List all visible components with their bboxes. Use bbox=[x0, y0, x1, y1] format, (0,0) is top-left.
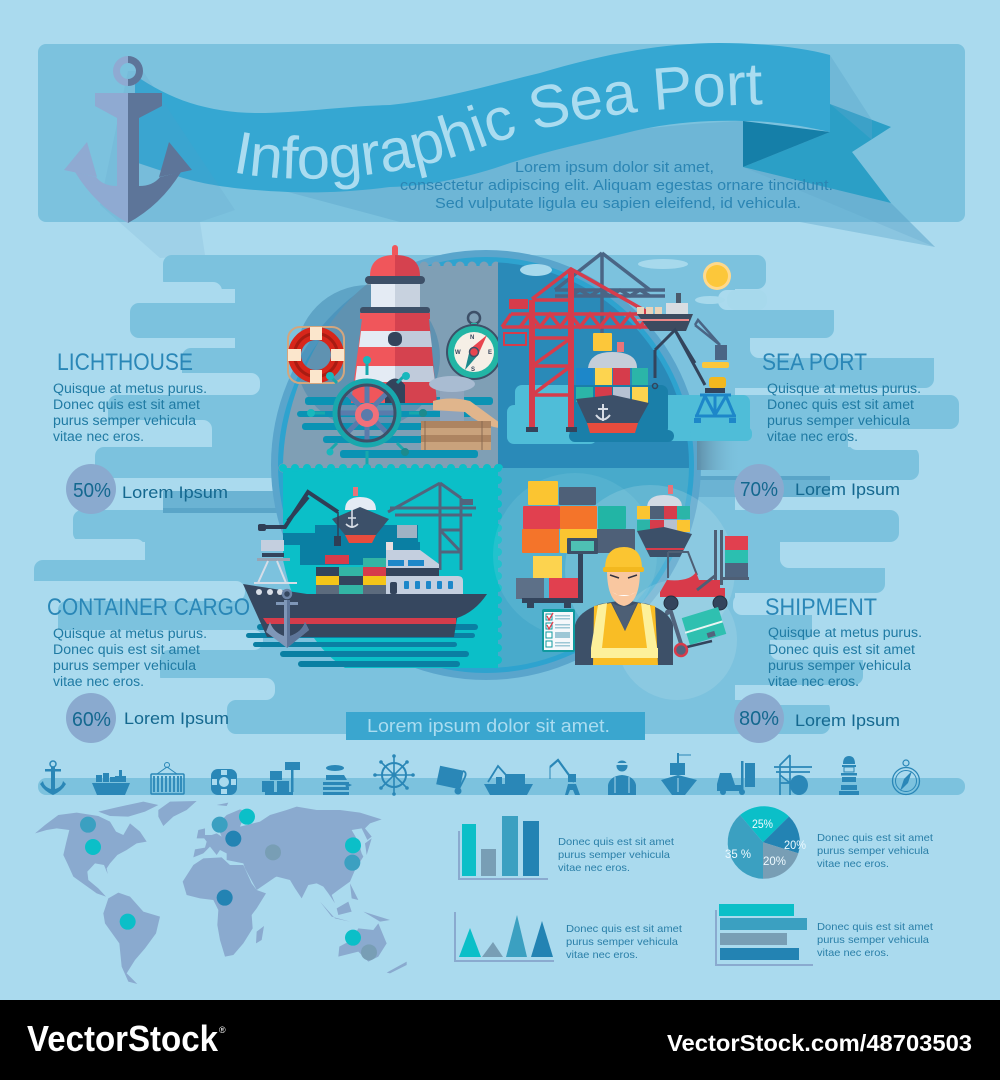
icon: port crane bbox=[774, 755, 812, 795]
text block bbox=[768, 625, 922, 689]
ribbon fold bbox=[743, 121, 830, 167]
icon: ship wheel bbox=[373, 754, 415, 796]
icon: worker bbox=[608, 760, 636, 795]
bar chart bbox=[459, 816, 674, 879]
panel: sea port text: SEA PORT bbox=[762, 349, 867, 376]
icon: container stack bbox=[522, 481, 635, 553]
icon: ferry bbox=[92, 770, 130, 795]
icon: compass bbox=[446, 312, 502, 380]
triangle chart: Donec quis est sit amet bbox=[566, 923, 682, 935]
icon: left deck crane bbox=[254, 492, 349, 583]
icon: compass: S bbox=[471, 367, 475, 373]
icon: small ship front bbox=[332, 487, 389, 543]
subtitle text: Lorem ipsum dolor sit amet, bbox=[515, 160, 714, 176]
callout bar: Lorem ipsum dolor sit amet. bbox=[367, 716, 610, 736]
text block: vitae nec eros. bbox=[53, 674, 144, 689]
icon: worker bbox=[575, 547, 673, 665]
icon: compass: W bbox=[455, 350, 461, 356]
icon: clipboard bbox=[542, 609, 575, 652]
icon: forklift bbox=[660, 530, 749, 610]
text block: purus semper vehicula bbox=[767, 413, 911, 428]
stat 60% bbox=[66, 693, 229, 743]
icon: forklift bbox=[717, 761, 755, 795]
background crane bbox=[555, 253, 665, 340]
text block: Donec quis est sit amet bbox=[768, 642, 915, 657]
footer bar bbox=[0, 1000, 1000, 1080]
text block: Donec quis est sit amet bbox=[53, 642, 200, 657]
icon: ship front bbox=[661, 753, 697, 795]
bar chart: vitae nec eros. bbox=[558, 862, 630, 874]
text block: Donec quis est sit amet bbox=[767, 397, 914, 412]
text block: Quisque at metus purus. bbox=[767, 381, 921, 396]
panel: shipment text bbox=[734, 594, 922, 743]
stat 60%: Lorem Ipsum bbox=[124, 709, 229, 728]
text block: purus semper vehicula bbox=[53, 658, 197, 673]
panel: lighthouse text: LICHTHOUSE bbox=[57, 349, 193, 376]
footer bar: VectorStock.com/48703503 bbox=[667, 1030, 972, 1056]
anchor shadow bbox=[100, 71, 235, 258]
stat 50%: Lorem Ipsum bbox=[122, 483, 228, 502]
icon: scale and boxes bbox=[262, 762, 300, 795]
icon: lighthouse bbox=[351, 245, 437, 403]
stat 80%: Lorem Ipsum bbox=[795, 711, 900, 730]
stat 50% bbox=[66, 464, 228, 514]
footer bar: VectorStock bbox=[27, 1018, 219, 1059]
icon: ship wheel bbox=[307, 356, 427, 472]
pie chart bbox=[725, 806, 933, 879]
text block: Quisque at metus purus. bbox=[53, 626, 207, 641]
stat 80%: 80% bbox=[739, 708, 779, 730]
panel: shipment text: SHIPMENT bbox=[765, 594, 877, 621]
triangle chart bbox=[455, 912, 682, 961]
pie chart: 20% bbox=[763, 854, 786, 868]
pie chart: vitae nec eros. bbox=[817, 858, 889, 870]
horizontal bar chart bbox=[716, 904, 933, 965]
Australia and islands bbox=[320, 838, 407, 973]
stat 80% bbox=[734, 693, 900, 743]
South America bbox=[103, 893, 160, 984]
icon: bollard bbox=[323, 765, 352, 795]
text block: purus semper vehicula bbox=[53, 413, 197, 428]
icon: clouds bbox=[520, 259, 767, 310]
panel: central circle bbox=[243, 245, 767, 700]
subtitle text bbox=[400, 160, 833, 212]
panel: header banner bbox=[38, 43, 965, 258]
panel: container cargo quadrant bbox=[243, 468, 500, 668]
ribbon tail bbox=[743, 104, 891, 203]
icon: cargo ship crane bbox=[484, 766, 533, 795]
icon: container bbox=[151, 762, 184, 794]
icon: cargo ship hull bbox=[243, 584, 487, 637]
icon: sun bbox=[703, 262, 731, 290]
ribbon lower shade bbox=[288, 121, 935, 247]
world map bbox=[35, 801, 407, 984]
water shapes bbox=[507, 385, 752, 444]
stat 70% bbox=[734, 464, 900, 514]
pie chart: purus semper vehicula bbox=[817, 845, 929, 857]
stat 60%: 60% bbox=[72, 709, 111, 731]
subtitle text: consectetur adipiscing elit. Aliquam egestas ornare tincidunt. bbox=[400, 178, 833, 194]
icon: bollard and rope bbox=[429, 376, 500, 428]
text block: vitae nec eros. bbox=[767, 429, 858, 444]
icon: wooden crate bbox=[421, 421, 491, 450]
icon: parcel truck bbox=[436, 766, 466, 794]
panel: sea port quadrant bbox=[498, 253, 767, 468]
panel: container cargo text bbox=[47, 594, 250, 743]
icon: cargo ship small bbox=[637, 485, 692, 557]
icon: red gantry crane bbox=[502, 269, 665, 432]
icon: life ring bbox=[288, 327, 344, 383]
pie chart: Donec quis est sit amet bbox=[817, 832, 933, 844]
wavy background bars bbox=[20, 255, 1000, 734]
water lines bbox=[297, 397, 493, 458]
text block bbox=[767, 381, 921, 444]
horizontal bar chart: vitae nec eros. bbox=[817, 947, 889, 959]
bar chart: purus semper vehicula bbox=[558, 849, 670, 861]
icon: distant ship bbox=[637, 293, 693, 331]
triangle chart: vitae nec eros. bbox=[566, 949, 638, 961]
icon: weighing scale bbox=[516, 538, 598, 608]
icon: dock crane bbox=[550, 760, 580, 795]
ribbon side shadow bbox=[830, 55, 872, 140]
icon: anchor bbox=[40, 761, 66, 795]
horizontal bar chart: Donec quis est sit amet bbox=[817, 921, 933, 933]
text block bbox=[53, 381, 207, 444]
icon: container ship bbox=[576, 333, 649, 433]
triangle chart: purus semper vehicula bbox=[566, 936, 678, 948]
title: Infographic Sea Port bbox=[237, 66, 762, 190]
subtitle text: Sed vulputate ligula eu sapien eleifend, id vehicula. bbox=[435, 196, 801, 212]
pie chart: 35 % bbox=[725, 847, 751, 861]
icon: small anchor bbox=[266, 590, 309, 648]
callout bar bbox=[346, 712, 645, 740]
Africa bbox=[183, 857, 266, 957]
gradient shade bbox=[697, 440, 742, 470]
horizontal bar chart: purus semper vehicula bbox=[817, 934, 929, 946]
text block: vitae nec eros. bbox=[768, 674, 859, 689]
water lines bbox=[246, 624, 478, 667]
bar chart: Donec quis est sit amet bbox=[558, 836, 674, 848]
icon: compass: E bbox=[488, 350, 492, 356]
text block: Quisque at metus purus. bbox=[768, 625, 922, 640]
panel: container cargo text: CONTAINER CARGO bbox=[47, 594, 250, 621]
ribbon body bbox=[135, 43, 830, 192]
icon: life ring bbox=[211, 769, 237, 795]
pie chart: 25% bbox=[752, 817, 773, 831]
icon: harbour crane grey bbox=[388, 483, 476, 570]
icon: stacked containers bbox=[316, 558, 386, 594]
text block: purus semper vehicula bbox=[768, 658, 912, 673]
stat 50%: 50% bbox=[73, 480, 111, 502]
panel: lighthouse quadrant bbox=[283, 245, 502, 472]
ribbon long shadow bbox=[743, 167, 935, 247]
footer bar: ® bbox=[219, 1025, 226, 1035]
text block: vitae nec eros. bbox=[53, 429, 144, 444]
North America bbox=[35, 813, 147, 897]
Greenland and arctic bbox=[98, 801, 228, 826]
icon: dock crane bbox=[652, 320, 736, 423]
icon: compass bbox=[892, 760, 920, 794]
text block bbox=[53, 626, 207, 689]
icon: superstructure bbox=[386, 542, 463, 594]
icon strip bbox=[38, 753, 965, 796]
stat 70%: 70% bbox=[740, 479, 778, 501]
stat 70%: Lorem Ipsum bbox=[795, 480, 900, 499]
icon: compass: N bbox=[470, 335, 474, 341]
icon: anchor bbox=[64, 56, 192, 223]
panel: lighthouse text bbox=[53, 349, 228, 514]
Eurasia bbox=[193, 807, 382, 903]
icon: lighthouse bbox=[839, 756, 859, 795]
text block: Donec quis est sit amet bbox=[53, 397, 200, 412]
pie chart: 20% bbox=[784, 838, 806, 852]
text block: Quisque at metus purus. bbox=[53, 381, 207, 396]
panel: sea port text bbox=[734, 349, 921, 514]
icon: parcel on hand truck bbox=[667, 607, 726, 656]
dark water bbox=[283, 525, 420, 565]
map markers bbox=[80, 809, 377, 960]
panel: shipment quadrant bbox=[493, 468, 749, 700]
